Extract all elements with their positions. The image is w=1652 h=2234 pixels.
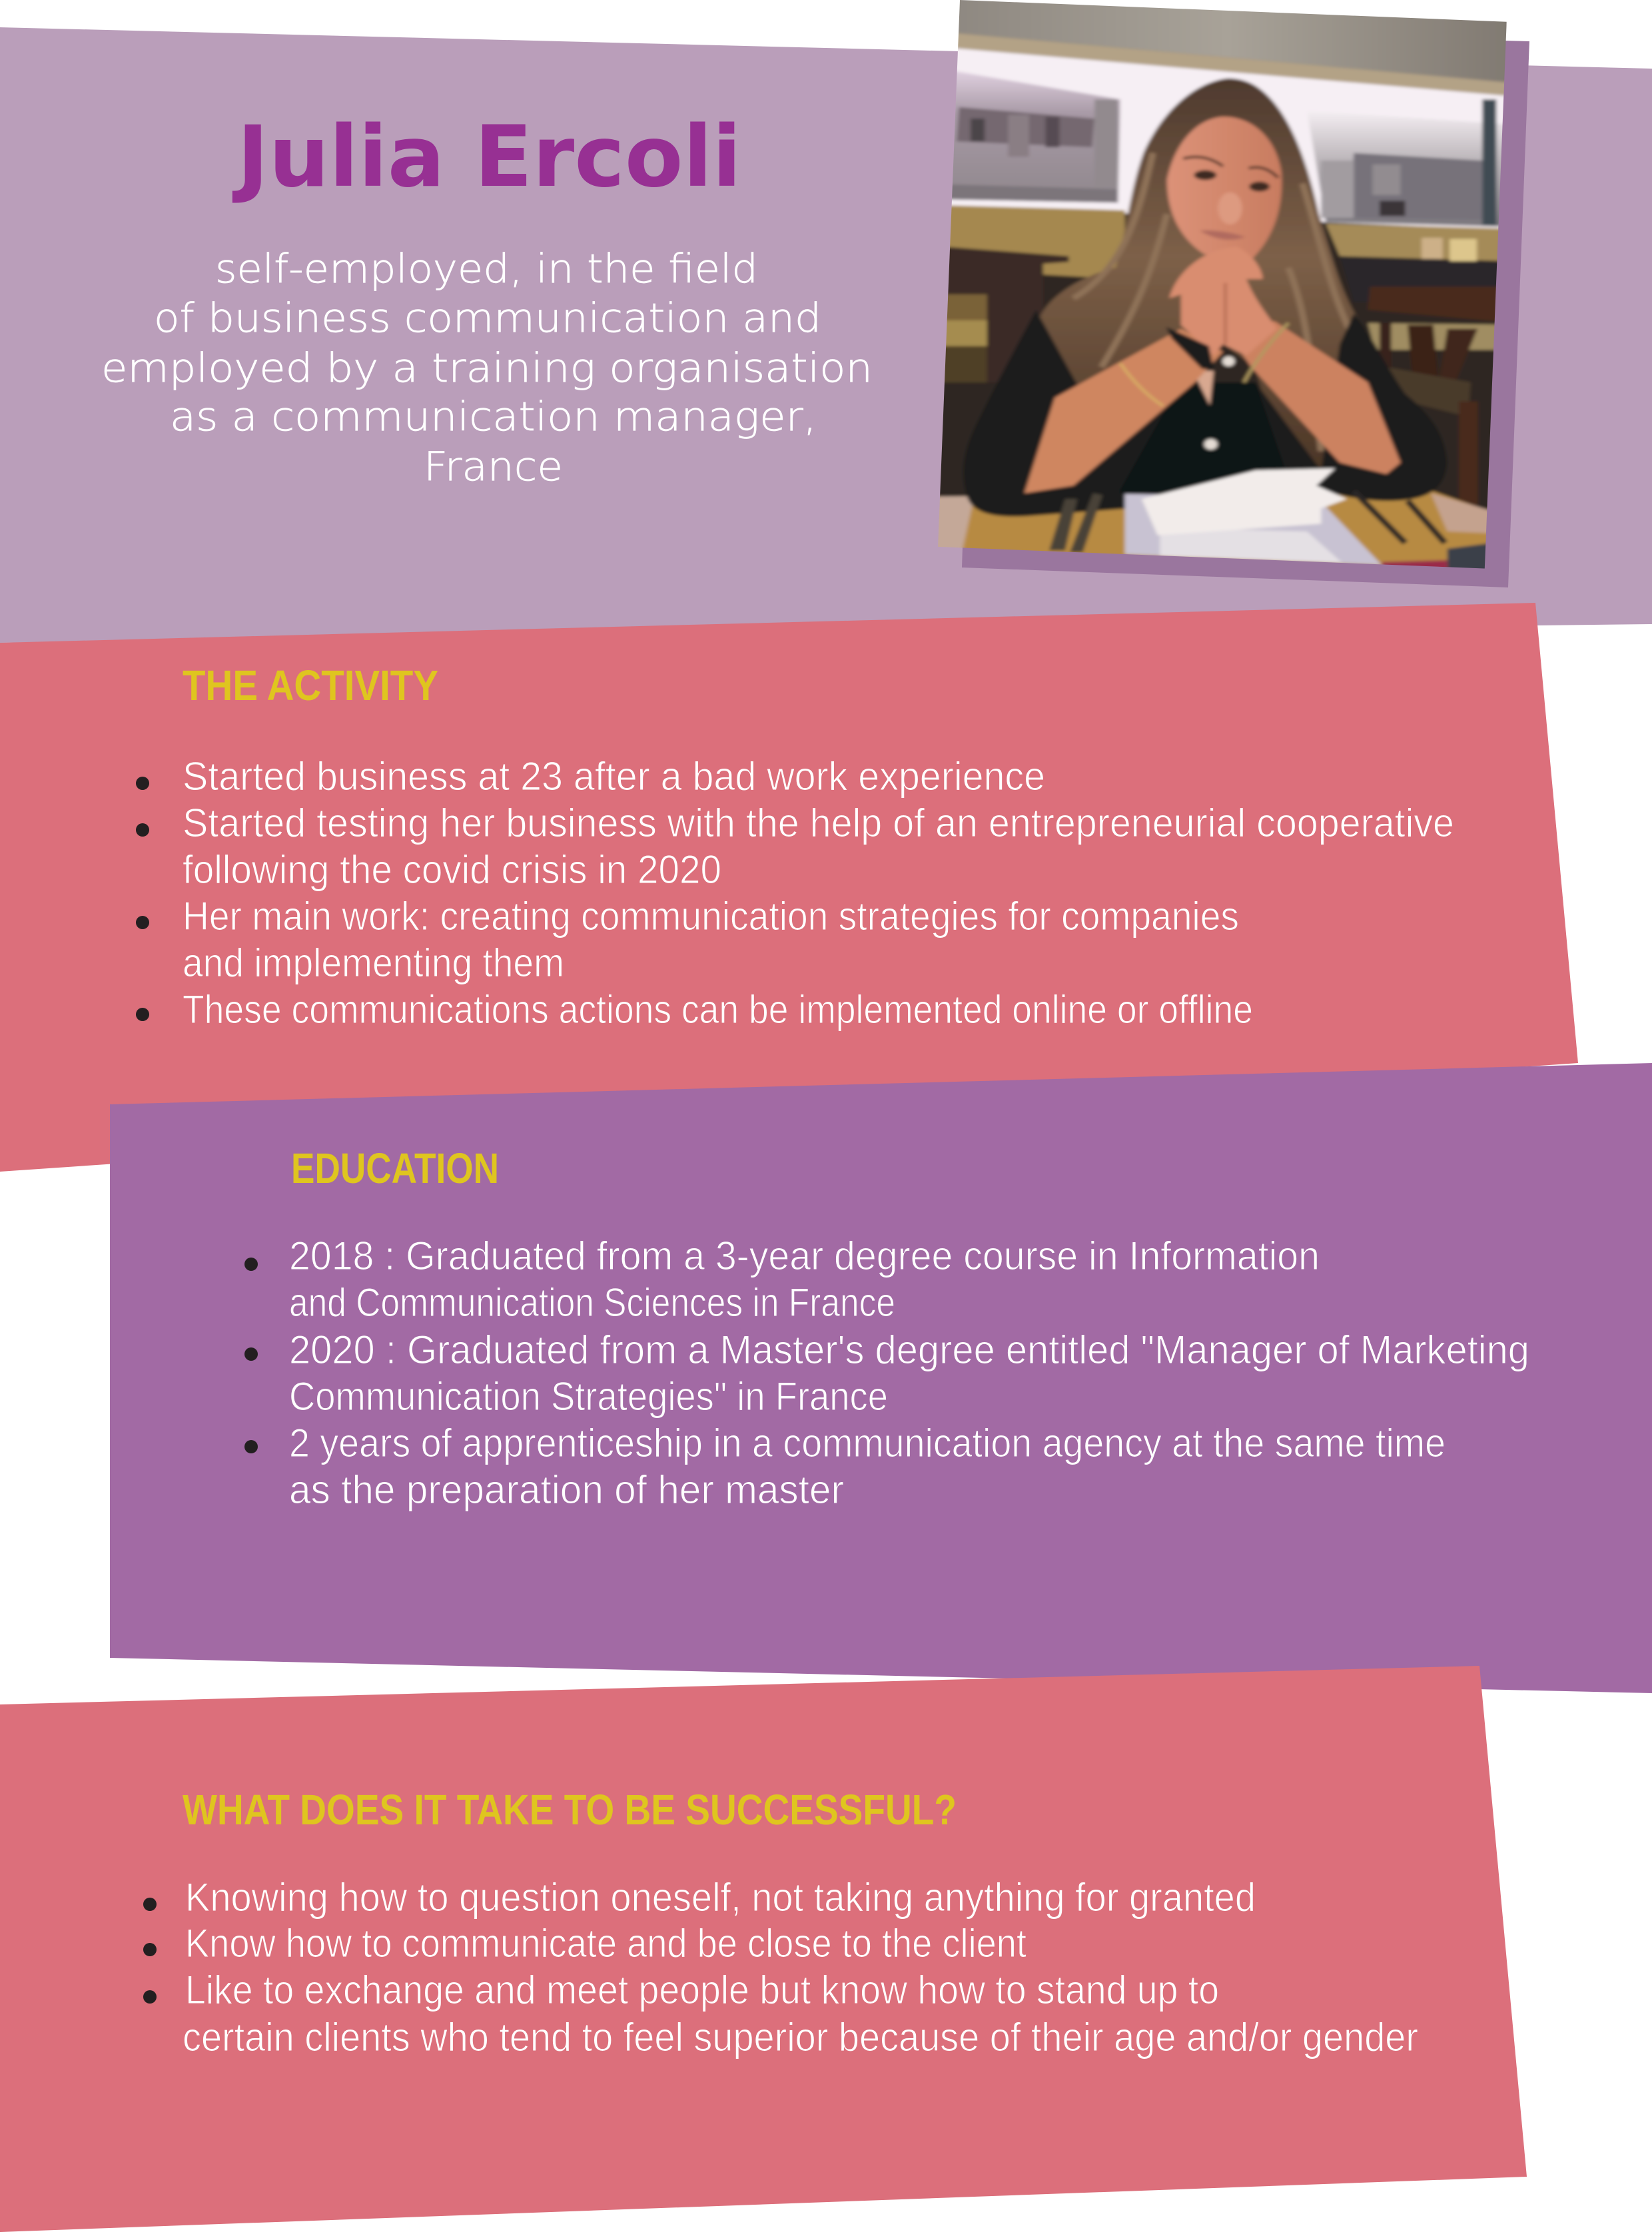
success bullet list: Know how to communicate and be close to the client xyxy=(185,1921,1027,1966)
subtitle text block: self-employed, in the field xyxy=(215,246,758,292)
activity bullet list: These communications actions can be implemented online or offline xyxy=(183,987,1253,1032)
drawn hands xyxy=(1169,246,1277,356)
drawn hair xyxy=(1036,79,1368,474)
education bullet list: 2018 : Graduated from a 3-year degree course in Information xyxy=(289,1234,1320,1278)
drawn table xyxy=(961,489,1486,565)
subtitle text block: employed by a training organisation xyxy=(101,345,873,392)
activity bullet list: Started business at 23 after a bad work experience xyxy=(183,754,1045,799)
panel: the activity xyxy=(0,603,1578,1172)
education bullet list: Communication Strategies" in France xyxy=(289,1374,888,1419)
drawn place setting xyxy=(1125,494,1382,565)
success bullet list: certain clients who tend to feel superior because of their age and/or gender xyxy=(183,2015,1418,2059)
subtitle text block: France xyxy=(424,444,563,490)
drawn shirt xyxy=(963,310,1447,516)
activity bullet list: Started testing her business with the help of an entrepreneurial cooperative xyxy=(183,801,1454,845)
panel: header band xyxy=(0,27,1652,643)
success bullet list: Like to exchange and meet people but know how to stand up to xyxy=(185,1968,1219,2012)
heading: education: EDUCATION xyxy=(291,1144,499,1192)
education bullet list: 2020 : Graduated from a Master's degree entitled "Manager of Marketing xyxy=(289,1327,1529,1372)
activity bullet list: Her main work: creating communication strategies for companies xyxy=(183,894,1239,938)
success bullet list xyxy=(143,1875,1418,2059)
drawn face xyxy=(1167,117,1282,260)
drawn arms xyxy=(1025,329,1223,493)
education bullet list: 2 years of apprenticeship in a communication agency at the same time xyxy=(289,1421,1446,1465)
education bullet list xyxy=(244,1234,1529,1512)
activity bullet list: following the covid crisis in 2020 xyxy=(183,847,721,892)
heading: the activity: THE ACTIVITY xyxy=(183,661,438,709)
title: Julia Ercoli xyxy=(232,107,741,206)
panel: education xyxy=(110,1063,1652,1693)
education bullet list: as the preparation of her master xyxy=(289,1467,844,1512)
activity bullet list: and implementing them xyxy=(183,940,564,985)
subtitle text block: of business communication and xyxy=(154,295,821,342)
activity bullet list xyxy=(136,754,1454,1032)
photo: portrait of Julia Ercoli xyxy=(938,0,1507,569)
heading: what does it take to be successful: WHAT DOES IT TAKE TO BE SUCCESSFUL? xyxy=(183,1786,957,1834)
success bullet list: Knowing how to question oneself, not taking anything for granted xyxy=(185,1875,1256,1920)
panel: what does it take to be successful xyxy=(0,1666,1527,2232)
subtitle text block: as a communication manager, xyxy=(170,394,817,440)
photo shadow xyxy=(962,27,1529,587)
subtitle text block xyxy=(101,246,873,490)
education bullet list: and Communication Sciences in France xyxy=(289,1280,895,1325)
